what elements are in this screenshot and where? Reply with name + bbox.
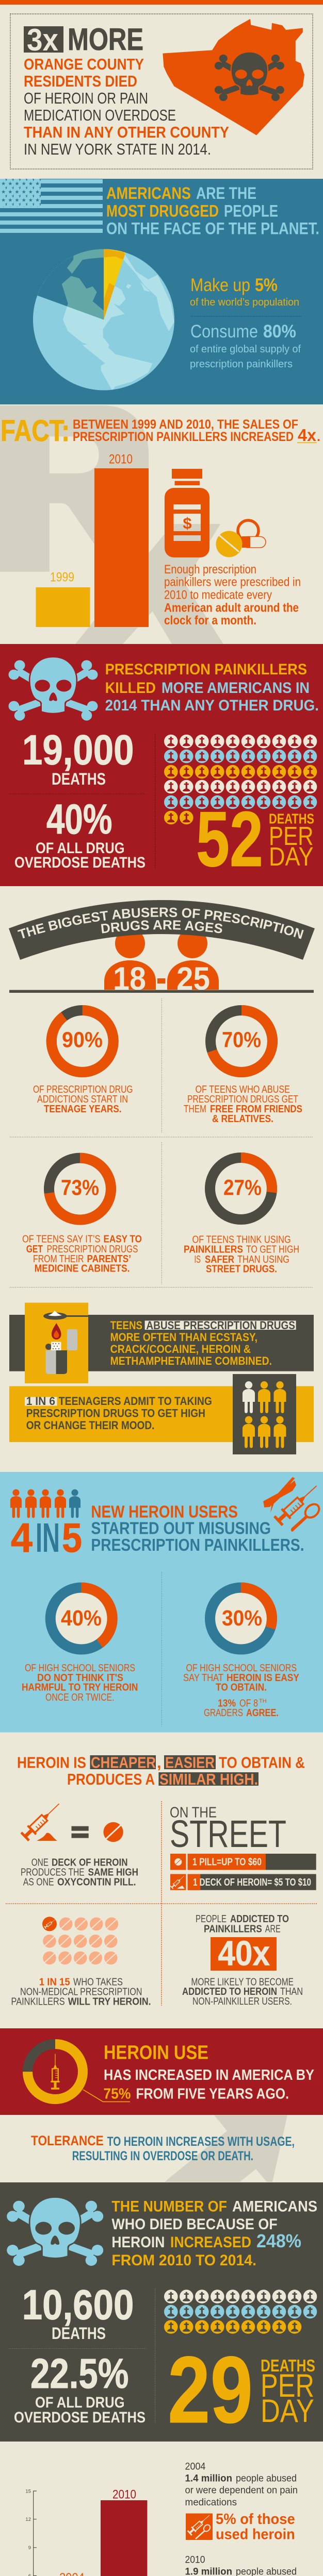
stat: 40x more likely: PAINKILLERS [204,1923,262,1935]
text: 90 percent caption: TEENAGE YEARS. [44,1104,122,1115]
stat: 22.5 percent of overdose deaths [14,2350,146,2426]
icon: two people 18-25: 25 [176,961,210,997]
chart: 52 tombstones [164,735,317,824]
text: 40 percent caption [22,1663,138,1703]
stat: 10,600 deaths: DEATHS [52,2324,106,2343]
text: 1 in 6 admit [25,1395,212,1432]
stat: 80 percent of supply: prescription painkillers [190,358,293,370]
chart: 40 percent donut: 40% [61,1606,102,1631]
stat: 10,600 deaths: 10,600 [22,2281,134,2328]
heading: new heroin users [91,1502,304,1554]
text: 70 percent caption: OF TEENS WHO ABUSE [195,1084,290,1095]
text: 70 percent caption: THEM [184,1104,206,1115]
text: 1 in 15: WILL TRY HEROIN. [68,1996,151,2007]
heading: Americans most drugged: ARE THE [196,184,256,202]
stat: 4 in 5 [11,1515,82,1561]
heading: painkillers killed [105,661,319,714]
stat: 5 percent of population: Make up [190,275,250,295]
text: 2004 stat: medications [185,2497,237,2508]
text: 90 percent caption [33,1084,133,1115]
chart: 29 tombstones [164,2290,317,2334]
stat: 40x more likely: ADDICTED TO [230,1913,289,1925]
banner: biggest abusers heading: DRUGS ARE AGES [101,920,222,934]
stat: 5 percent of population [190,275,299,308]
stat: 40 percent of overdose deaths: 40% [46,796,112,843]
panel: 3x more intro [0,0,323,179]
stat: 4 in 5: 4 [11,1515,33,1561]
stat: 29 deaths per day: 29 [168,2336,253,2443]
text: 30 percent caption: OF 8 [239,1698,258,1709]
stat: 19,000 deaths [22,726,134,788]
text: 30 percent caption: TO OBTAIN. [216,1682,267,1693]
icon: six people, one highlighted [243,1381,286,1448]
heading: fact sales increased 4x [1,414,320,448]
text: 40 percent caption: HARMFUL TO TRY HEROIN [22,1682,138,1693]
chart: pill street price bar: 1 PILL=UP TO $60 [192,1857,262,1868]
text: 2010 stat [185,2555,298,2576]
stat: 40x more likely: 40x [218,1934,270,1973]
stat: 40 percent of overdose deaths [14,796,146,871]
text: 1 in 15: PAINKILLERS [11,1996,65,2007]
stat: 40x more likely: THAN [280,1986,303,1997]
panel: sales of painkillers fact [0,404,323,644]
banner: biggest abusers heading [9,900,315,960]
panel: 2004 vs 2010 heroin use [0,2442,323,2576]
chart: 90 percent donut [52,1010,114,1072]
stat: 40 percent of overdose deaths: OVERDOSE DEATHS [14,854,146,871]
text: overdose statement: IN NEW YORK STATE IN 2014. [24,140,211,158]
text: tolerance increases [31,2133,295,2163]
heading: cheaper easier similar high: PRODUCES A [67,1770,155,1788]
text: 1 in 6 admit: OR CHANGE THEIR MOOD. [26,1419,154,1432]
heading: new heroin users: STARTED OUT MISUSING [91,1519,271,1538]
text: 27 percent caption: IS [194,1254,201,1265]
chart: bar chart 2004 vs 2010: 15 [25,2488,31,2495]
icon: skull and crossbones [7,2197,103,2266]
chart: bar chart 2004 vs 2010 [25,2487,164,2576]
watermark: Rx [0,405,223,644]
chart: 1999 vs 2010 bars [36,452,149,627]
stat: 80 percent of supply: of entire global supply of [190,343,301,355]
text: abuse more often: TEENS [110,1319,142,1332]
heading: number of Americans increased: HEROIN [111,2234,165,2251]
text: 27 percent caption [184,1234,299,1275]
stat: 52 deaths per day: DAY [269,842,314,871]
text: 30 percent caption: SAY THAT [183,1672,223,1684]
heading: Americans most drugged: PEOPLE [224,202,278,221]
text: abuse more often [110,1319,296,1367]
panel: tolerance [0,2115,323,2182]
heading: number of Americans increased: INCREASED [170,2234,251,2251]
watermark: arrow [165,2115,287,2182]
text: 1 in 6 admit: TEENAGERS ADMIT TO TAKING [59,1395,212,1408]
stat: 80 percent of supply: Consume [190,321,258,342]
text: heroin use 75 percent: 75% [103,2086,131,2103]
callout: 5 percent used heroin: 5% of those [216,2511,295,2528]
text: 90 percent caption: ADDICTIONS START IN [37,1094,128,1105]
stat: 19,000 deaths: DEATHS [52,770,106,788]
icon: pills [216,520,266,557]
text: 1 in 6 admit: 1 IN 6 [26,1395,55,1408]
chart: globe pie [33,249,174,391]
text: 1 in 15: 1 IN 15 [39,1976,70,1988]
text: 30 percent caption: 13% [218,1698,236,1709]
map: Orange County with skull [163,19,304,135]
callout: teens abuse prescription drugs [9,1302,314,1383]
chart: heroin street price bar [170,1874,316,1890]
heading: fact sales increased 4x: 4x [298,426,317,445]
callout: 1 in 6 teenagers [9,1374,314,1454]
text: 40 percent caption: OF HIGH SCHOOL SENIORS [25,1663,135,1674]
stat: 52 deaths per day: 52 [196,795,263,883]
text: 40 percent caption: ONCE OR TWICE. [45,1692,115,1703]
text: enough prescribed: painkillers were prescribed in [164,575,301,589]
text: 70 percent caption [184,1084,302,1125]
text: enough prescribed: clock for a month. [164,614,256,628]
chart: pill street price bar [170,1854,316,1870]
text: 1 in 15 [11,1976,151,2007]
chart: 73 percent donut: 73% [61,1176,99,1200]
text: 30 percent caption: GRADERS [204,1707,243,1719]
heading: Americans most drugged [106,184,319,238]
text: heroin use 75 percent: FROM FIVE YEARS AGO. [136,2086,289,2103]
chart: bar chart 2004 vs 2010: 2010 [112,2487,136,2502]
heading: on the street: STREET [170,1812,286,1855]
chart: 1999 vs 2010 bars: 1999 [50,570,74,584]
stat: 19,000 deaths: 19,000 [22,726,134,774]
text: 73 percent caption: GET [26,1244,43,1255]
panel: most drugged people [0,179,323,404]
chart: 30 percent donut [210,1588,272,1650]
text: one deck of heroin [21,1857,138,1888]
text: enough prescribed: American adult around the [164,601,299,615]
heading: cheaper easier similar high: EASIER [165,1754,215,1772]
text: 27 percent caption: TO GET HIGH [246,1244,299,1256]
text: one deck of heroin: AS ONE [23,1876,54,1888]
text: 2004 stat: or were dependent on pain [185,2485,298,2496]
icon: two people 18-25 [9,928,314,997]
text: 2004 stat: people abused [236,2473,297,2484]
text: overdose statement: OF HEROIN OR PAIN [24,89,148,107]
text: overdose statement: MEDICATION OVERDOSE [24,106,176,124]
text: one deck of heroin: ONE [31,1857,49,1868]
heading: Americans most drugged: AMERICANS [106,184,191,202]
heading: fact sales increased 4x: BETWEEN 1999 AND 2010, THE SALES OF [73,418,298,432]
chart: 1999 vs 2010 bars: 2010 [109,452,133,467]
panel: heroin deaths [0,2182,323,2443]
text: 73 percent caption: FROM THEIR [33,1253,84,1265]
text: 30 percent caption: OF HIGH SCHOOL SENIORS [186,1663,297,1674]
banner: biggest abusers heading: THE BIGGEST ABUSERS OF PRESCRIPTION [18,908,304,939]
chart: 1 in 15 pills [42,1917,118,1964]
panel: painkillers killed more [0,644,323,886]
heading: number of Americans increased [111,2198,317,2269]
icon: five people [10,1489,80,1518]
text: 90 percent caption: OF PRESCRIPTION DRUG [33,1084,133,1095]
heading: new heroin users: NEW HEROIN USERS [91,1502,238,1521]
stat: 40x more likely: PEOPLE [196,1913,227,1925]
text: 1 in 15: WHO TAKES [73,1976,123,1988]
heading: number of Americans increased: FROM 2010 TO 2014. [111,2252,256,2269]
chart: 27 percent donut: 27% [223,1176,262,1200]
text: 2010 stat: 2010 [185,2555,205,2566]
heading: painkillers killed: MORE AMERICANS IN [162,680,310,697]
text: 73 percent caption: PARENTS’ [87,1253,131,1265]
chart: bar chart 2004 vs 2010: 12 [25,2517,31,2522]
panel: heroin use increased [0,2028,323,2115]
chart: bar chart 2004 vs 2010: 9 [28,2545,31,2551]
chart: 75 percent donut with syringe [28,2044,130,2102]
text: 73 percent caption: PRESCRIPTION DRUGS [47,1244,138,1255]
heading: number of Americans increased: 248% [256,2230,301,2251]
panel: 4 in 5 new heroin users [0,1472,323,1732]
text: 30 percent caption: TH [259,1698,267,1704]
text: 70 percent caption: & RELATIVES. [212,1113,273,1125]
text: 30 percent caption: AGREE. [246,1707,279,1719]
text: heroin use 75 percent [103,2042,314,2103]
text: abuse more often: CRACK/COCAINE, HEROIN & [110,1343,251,1355]
text: enough prescribed: 2010 to medicate every [164,588,272,602]
heading: cheaper easier similar high: , [157,1754,162,1772]
text: overdose statement: RESIDENTS DIED [24,72,137,90]
chart: 90 percent donut: 90% [62,1028,103,1053]
icon: two people 18-25: 18 [113,961,146,997]
stat: 22.5 percent of overdose deaths: 22.5% [30,2350,129,2397]
text: 27 percent caption: SAFER [205,1254,234,1265]
callout: 5 percent used heroin [186,2511,295,2543]
stat: 52 deaths per day: PER [269,821,314,851]
text: overdose statement: THAN IN ANY OTHER COUNTY [24,123,229,141]
icon: American flag [0,179,103,233]
text: one deck of heroin: OXYCONTIN PILL. [57,1876,136,1888]
text: 30 percent caption: HEROIN IS EASY [227,1672,300,1684]
chart: 27 percent donut [210,1158,272,1219]
text: one deck of heroin: DECK OF HEROIN [52,1857,128,1868]
icon: tourniquet, syringe, spoon [263,1477,322,1532]
icon: heroin deck equals pill [20,1800,123,1842]
text: 27 percent caption: THAN USING [237,1254,289,1265]
chart: 70 percent donut [211,1010,272,1072]
stat: 40x more likely: NON-PAINKILLER USERS. [192,1996,292,2007]
stat: 40 percent of overdose deaths: OF ALL DRUG [36,840,125,857]
heading: on the street [170,1805,286,1855]
text: 70 percent caption: FREE FROM FRIENDS [210,1104,302,1115]
heading: on the street: ON THE [170,1805,217,1821]
heading: number of Americans increased: WHO DIED BECAUSE OF [111,2216,278,2233]
text: 73 percent caption: OF TEENS SAY IT’S [22,1234,100,1245]
stat: 5 percent of population: 5% [255,275,278,295]
heading: fact sales increased 4x: FACT: [1,414,70,448]
text: 40 percent caption: DO NOT THINK IT'S [37,1672,123,1684]
text: 2004 stat: 2004 [185,2462,206,2472]
heading: fact sales increased 4x: . [317,430,320,444]
stat: 80 percent of supply [190,321,301,370]
text: one deck of heroin: SAME HIGH [88,1867,138,1878]
icon: pill bottle [165,469,209,557]
stat: 40x more likely: MORE LIKELY TO BECOME [191,1976,294,1988]
stat: 80 percent of supply: 80% [263,321,296,342]
callout: 5 percent used heroin: used heroin [216,2527,295,2543]
stat: 22.5 percent of overdose deaths: OF ALL DRUG [35,2394,125,2411]
stat: 5 percent of population: of the world’s population [190,296,299,308]
icon: pill bottle: $ [183,514,192,532]
panel: heroin is cheaper [0,1732,323,2028]
text: overdose statement: ORANGE COUNTY [24,55,144,73]
icon: spoon and lighter [43,1311,88,1374]
chart: 70 percent donut: 70% [222,1028,261,1053]
heading: cheaper easier similar high: TO OBTAIN & [219,1754,305,1772]
text: 1 in 15: NON-MEDICAL PRESCRIPTION [20,1987,142,1998]
heading: 3x more: 3x [27,23,58,57]
chart: 73 percent donut [49,1158,111,1220]
heading: painkillers killed: PRESCRIPTION PAINKILLERS [105,661,307,678]
text: abuse more often: METHAMPHETAMINE COMBINED. [110,1354,272,1367]
text: 73 percent caption: EASY TO [103,1234,142,1245]
heading: 3x more: MORE [68,22,143,57]
heading: cheaper easier similar high: SIMILAR HIGH. [159,1770,258,1788]
heading: number of Americans increased: THE NUMBER OF [111,2198,227,2215]
text: 30 percent caption [183,1663,300,1719]
text: 2004 stat [185,2462,298,2508]
text: 27 percent caption: PAINKILLERS [184,1244,243,1256]
text: 27 percent caption: OF TEENS THINK USING [192,1234,291,1246]
stat: 40x more likely: ARE [265,1923,281,1935]
heading: 3x more [24,22,143,57]
stat: 4 in 5: IN [36,1515,60,1561]
text: abuse more often: MORE OFTEN THAN ECSTASY, [110,1331,257,1344]
icon: skull and crossbones [8,657,98,721]
heading: cheaper easier similar high [17,1754,305,1788]
text: abuse more often: ABUSE PRESCRIPTION DRUGS [146,1319,295,1332]
text: 73 percent caption [22,1234,142,1275]
text: overdose statement [24,55,229,158]
text: tolerance increases: RESULTING IN OVERDOSE OR DEATH. [72,2149,253,2163]
stat: 10,600 deaths [22,2281,134,2343]
text: heroin use 75 percent: HEROIN USE [104,2042,208,2063]
stat: 40x more likely: ADDICTED TO HEROIN [182,1986,277,1997]
heading: cheaper easier similar high: CHEAPER [91,1754,156,1772]
chart: 30 percent donut: 30% [222,1606,262,1631]
text: 2004 stat: 1.4 million [185,2473,232,2484]
text: one deck of heroin: PRODUCES THE [21,1867,85,1878]
heading: cheaper easier similar high: HEROIN IS [17,1754,86,1772]
text: tolerance increases: TOLERANCE [31,2133,104,2148]
panel: biggest abusers and teen stats [9,900,315,1454]
heading: painkillers killed: KILLED [105,680,156,697]
text: 1 in 6 admit: PRESCRIPTION DRUGS TO GET HIGH [26,1406,205,1419]
text: enough prescribed [164,563,301,628]
text: enough prescribed: Enough prescription [164,563,256,577]
text: 73 percent caption: MEDICINE CABINETS. [35,1263,130,1275]
stat: 22.5 percent of overdose deaths: OVERDOSE DEATHS [14,2409,146,2426]
stat: 4 in 5: 5 [62,1515,82,1561]
heading: Americans most drugged: MOST DRUGGED [106,202,219,221]
text: 27 percent caption: STREET DRUGS. [206,1264,277,1275]
chart: 40 percent donut [51,1588,112,1650]
stat: 40x more likely [182,1913,303,2007]
